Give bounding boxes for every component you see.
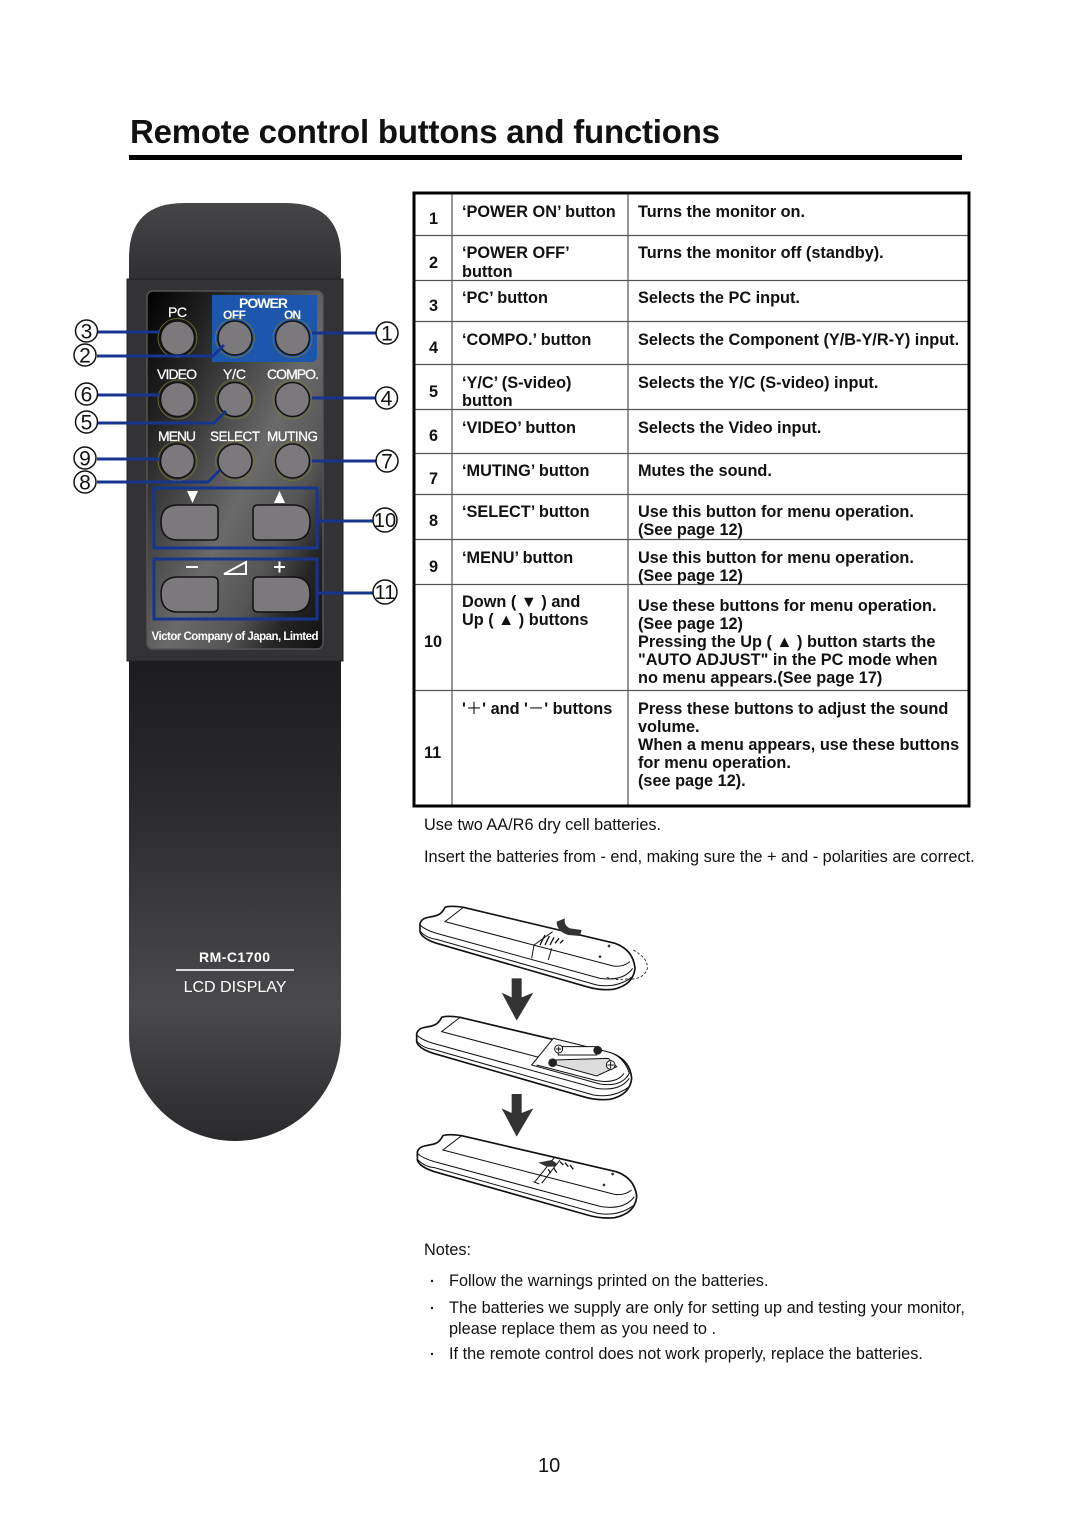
row 6: 6 — [429, 427, 438, 445]
battery replacement illustration — [417, 906, 647, 1218]
row 2: button — [462, 263, 513, 281]
round buttons — [158, 318, 312, 480]
callout lines — [97, 332, 376, 593]
row 8: (See page 12) — [638, 521, 743, 539]
row 9: 9 — [429, 558, 438, 576]
notes: If the remote control does not work properly, replace the batteries. — [449, 1345, 923, 1363]
callout numbers: 1 — [381, 322, 393, 346]
callout numbers: 5 — [81, 412, 92, 434]
callout numbers: 4 — [381, 388, 393, 410]
volume buttons — [154, 559, 317, 619]
callout numbers: 2 — [79, 344, 91, 368]
row 11: (see page 12). — [638, 772, 746, 790]
row 2 — [429, 244, 884, 281]
row 2: ‘POWER OFF’ — [462, 244, 570, 262]
row 8: ‘SELECT’ button — [462, 503, 590, 521]
remote middle band — [127, 279, 343, 661]
row 10: "AUTO ADJUST" in the PC mode when — [638, 651, 937, 669]
row 10: 10 — [424, 633, 442, 651]
battery instructions — [424, 816, 975, 866]
step 1: open cover — [420, 906, 647, 990]
row 10: no menu appears.(See page 17) — [638, 669, 882, 687]
callout numbers: 8 — [79, 472, 91, 494]
row 5 — [429, 374, 878, 410]
row 11: When a menu appears, use these buttons — [638, 736, 959, 754]
row 10: Use these buttons for menu operation. — [638, 597, 937, 615]
row 9: (See page 12) — [638, 567, 743, 585]
row 11: Press these buttons to adjust the sound — [638, 700, 948, 718]
row 6 — [429, 419, 821, 445]
row 11: '＋' and '－' buttons — [462, 700, 612, 718]
row 5: ‘Y/C’ (S-video) — [462, 374, 571, 392]
button labels: MUTING — [267, 429, 318, 444]
arrow down — [502, 1094, 533, 1137]
model label — [176, 949, 294, 996]
step 2: insert batteries — [417, 1016, 632, 1100]
notes: please replace them as you need to . — [449, 1320, 716, 1338]
row 9 — [429, 549, 914, 585]
row 9: ‘MENU’ button — [462, 549, 573, 567]
callout numbers: 3 — [81, 320, 92, 344]
button labels: SELECT — [210, 429, 260, 444]
button labels: VIDEO — [157, 366, 197, 382]
callout numbers: 6 — [81, 384, 92, 406]
row 3: Selects the PC input. — [638, 289, 800, 307]
row 1: ‘POWER ON’ button — [462, 203, 616, 221]
row 2: Turns the monitor off (standby). — [638, 244, 884, 262]
title: Remote control buttons and functions — [130, 113, 720, 150]
remote control illustration — [127, 203, 343, 1141]
row 11: volume. — [638, 718, 700, 736]
row 10: Pressing the Up ( ▲ ) button starts the — [638, 633, 935, 651]
row 7: 7 — [429, 470, 438, 488]
manufacturer text: Victor Company of Japan, Limted — [152, 631, 318, 643]
model label: LCD DISPLAY — [184, 979, 287, 996]
row 4: Selects the Component (Y/B-Y/R-Y) input. — [638, 331, 959, 349]
row 1: 1 — [429, 210, 438, 228]
row 6: ‘VIDEO’ button — [462, 419, 576, 437]
row 8: 8 — [429, 512, 438, 530]
callout numbers: 11 — [375, 582, 395, 604]
arrow down — [502, 978, 533, 1021]
button labels: PC — [168, 304, 187, 320]
row 10: (See page 12) — [638, 615, 743, 633]
row 7: Mutes the sound. — [638, 462, 772, 480]
row 1: Turns the monitor on. — [638, 203, 805, 221]
battery instructions: Insert the batteries from - end, making sure the + and - polarities are correct. — [424, 848, 975, 866]
row 5: Selects the Y/C (S-video) input. — [638, 374, 878, 392]
page number: 10 — [538, 1455, 560, 1477]
row 4: 4 — [429, 339, 438, 357]
row 3: 3 — [429, 297, 438, 315]
row 3 — [429, 289, 800, 315]
row 10 — [424, 593, 937, 687]
row 8 — [429, 503, 914, 539]
notes: The batteries we supply are only for setting up and testing your monitor, — [449, 1299, 965, 1317]
power section background — [212, 295, 317, 362]
remote top body — [129, 203, 341, 285]
button labels: POWER — [239, 295, 288, 311]
button labels: Y/C — [223, 366, 246, 382]
down and up buttons — [154, 488, 317, 548]
model label: RM-C1700 — [199, 949, 270, 965]
callout numbers: 9 — [79, 448, 91, 470]
row 1 — [429, 203, 805, 228]
function table — [414, 193, 969, 806]
button labels — [157, 295, 319, 444]
step 3: close cover — [417, 1135, 637, 1218]
remote lower body — [129, 655, 341, 1141]
row 10: Up ( ▲ ) buttons — [462, 611, 588, 629]
row 6: Selects the Video input. — [638, 419, 821, 437]
title rule — [129, 155, 962, 160]
button labels: COMPO. — [267, 366, 319, 382]
row 11: 11 — [424, 744, 441, 762]
button labels: OFF — [223, 308, 246, 322]
button panel — [147, 291, 323, 649]
notes: Follow the warnings printed on the batteries. — [449, 1272, 768, 1290]
notes: Notes: — [424, 1241, 471, 1259]
row 11 — [424, 700, 959, 790]
callout numbers: 7 — [381, 450, 393, 474]
row 9: Use this button for menu operation. — [638, 549, 914, 567]
row 7: ‘MUTING’ button — [462, 462, 590, 480]
row 5: button — [462, 392, 513, 410]
row 2: 2 — [429, 254, 438, 272]
battery instructions: Use two AA/R6 dry cell batteries. — [424, 816, 661, 834]
row 4: ‘COMPO.’ button — [462, 331, 591, 349]
button labels: MENU — [158, 428, 196, 444]
row 8: Use this button for menu operation. — [638, 503, 914, 521]
row 5: 5 — [429, 383, 438, 401]
row 7 — [429, 462, 772, 488]
row 3: ‘PC’ button — [462, 289, 548, 307]
button labels: ON — [284, 308, 301, 322]
row 10: Down ( ▼ ) and — [462, 593, 580, 611]
notes — [424, 1241, 965, 1363]
table grid — [414, 193, 969, 806]
callout numbers — [74, 320, 398, 604]
row 4 — [429, 331, 959, 357]
row 11: for menu operation. — [638, 754, 791, 772]
callout numbers: 10 — [374, 510, 396, 532]
